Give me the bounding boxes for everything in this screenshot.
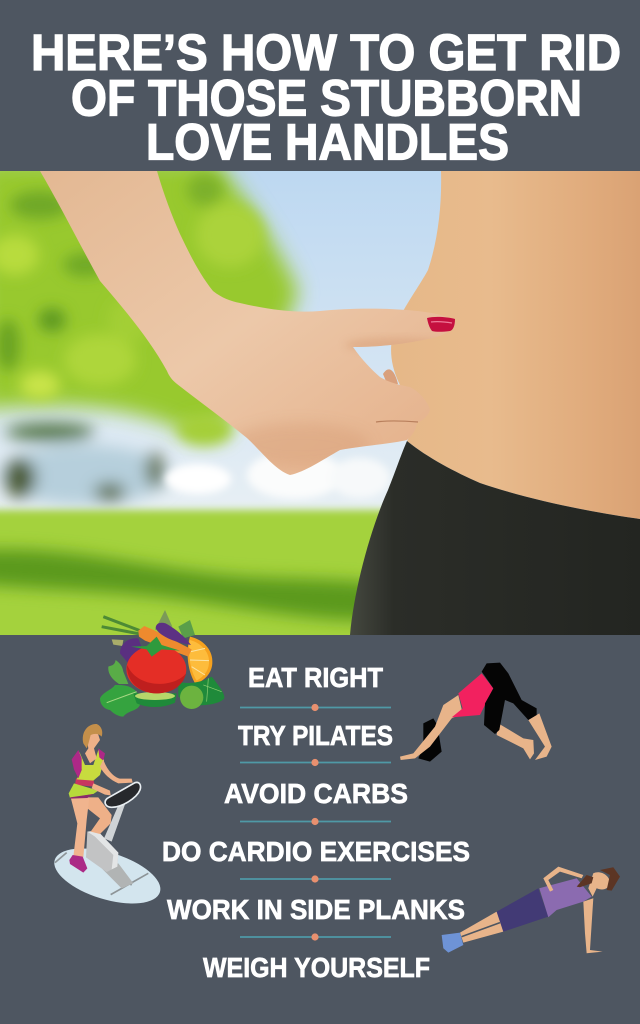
list of tips: DO CARDIO EXERCISES [162,836,470,867]
purple top [539,878,592,917]
blurred tree canopy [0,160,298,433]
shorts [69,783,98,798]
hair [83,724,102,748]
grass shadow band [0,549,400,621]
nail highlight [431,322,452,323]
left leaf [100,685,140,717]
hair [418,718,442,762]
bent arm [543,867,583,892]
icon: side plank figure [442,867,620,953]
aubergine [156,623,191,645]
lime [180,686,203,709]
legs [460,912,503,943]
right leaf [178,677,224,705]
hair [577,867,620,891]
post [104,800,126,842]
black shorts [350,441,640,635]
shoe [69,855,87,873]
tree foliage mottling [0,174,264,446]
header band background [0,0,640,172]
base bars [55,853,148,895]
front lower leg [497,723,534,759]
carrot [138,626,192,657]
flywheel housing [86,831,118,872]
arm and shoulders [400,695,463,760]
orange slice [188,637,212,684]
arms [100,759,133,783]
handlebar [105,782,141,807]
black leggings [482,663,537,734]
icon: pilates down-dog figure [400,663,552,762]
base disc [48,838,167,914]
pink top [452,673,493,717]
grass [0,510,400,655]
icon: vegetables and fruit [100,610,224,717]
sky [0,171,640,521]
photo: woman pinching love handle [0,171,640,635]
icon: woman on exercise bike [48,724,167,914]
list of tips: AVOID CARBS [224,778,408,809]
nail polish [427,317,455,332]
sky gap under the tree with trunks [0,423,170,505]
list of tips: WORK IN SIDE PLANKS [167,894,465,925]
arm and hand [40,171,455,475]
light leaf [108,660,128,684]
top [77,750,104,781]
title: OF THOSE STUBBORN [71,70,582,126]
list of tips [162,662,470,983]
head and neck [588,872,610,897]
sleeves [72,750,82,778]
hidden finger [383,369,398,386]
list of tips: EAT RIGHT [248,662,383,693]
finger crease [376,421,418,422]
title [31,24,621,170]
clouds [165,451,390,499]
lower panel background [0,635,640,1024]
dividers with orange dots [240,704,391,941]
shorts [497,888,548,932]
cucumber [133,693,177,707]
tomato [126,645,186,693]
list of tips: TRY PILATES [238,720,393,751]
support arm [583,898,603,953]
list of tips: WEIGH YOURSELF [203,952,430,983]
far leg [85,797,112,834]
waist [75,778,95,787]
neck and face [85,732,100,763]
near leg [71,797,89,857]
belly and torso [391,171,640,519]
shoe [442,933,463,953]
rear lower leg [528,713,552,760]
title: LOVE HANDLES [146,114,509,170]
